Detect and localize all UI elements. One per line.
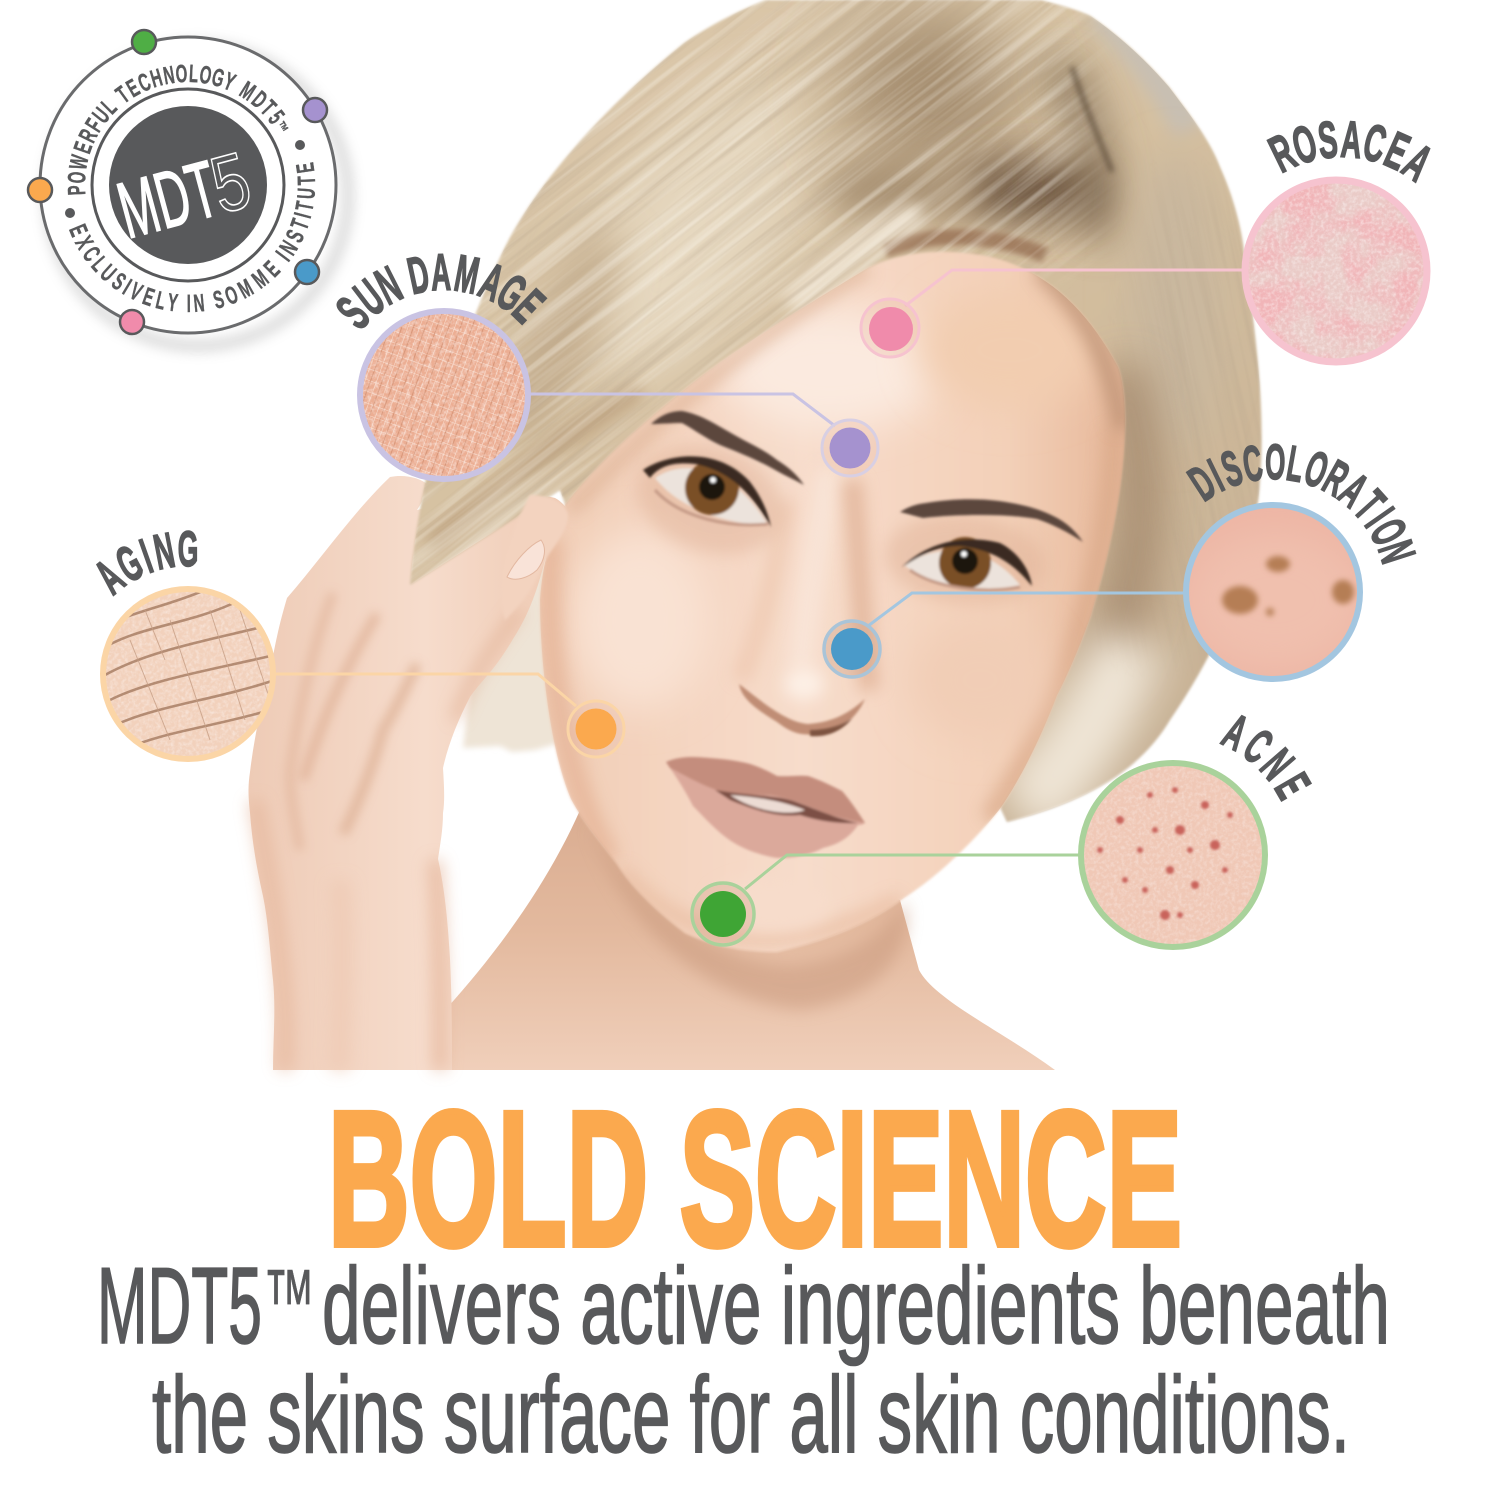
badge bottom arc text: N bbox=[192, 289, 206, 318]
rosacea label: S bbox=[1315, 110, 1340, 170]
aging label: A bbox=[85, 550, 135, 605]
callout: aging bbox=[85, 522, 624, 762]
aging connector bbox=[272, 674, 576, 706]
badge top arc text: F bbox=[80, 114, 109, 137]
discoloration label: C bbox=[1239, 436, 1266, 493]
badge bottom arc text: I bbox=[118, 274, 136, 300]
discoloration label: A bbox=[1329, 463, 1378, 518]
badge top arc text: G bbox=[209, 63, 227, 93]
acne skin sample bbox=[1078, 760, 1268, 950]
aging label: G bbox=[108, 535, 152, 593]
badge bottom arc text: E bbox=[291, 161, 320, 175]
portrait photo of woman bbox=[0, 0, 1500, 1070]
sun damage label: A bbox=[471, 251, 513, 313]
discoloration label: S bbox=[1215, 440, 1249, 498]
badge bottom arc text: I bbox=[187, 290, 191, 318]
badge bottom arc text: S bbox=[210, 285, 227, 315]
aging label: G bbox=[178, 522, 198, 577]
badge bottom arc text: L bbox=[86, 252, 113, 277]
badge top arc text bbox=[63, 60, 291, 196]
rosacea label: C bbox=[1358, 112, 1392, 174]
acne label: A bbox=[1214, 704, 1256, 762]
badge inner ring bbox=[92, 89, 284, 281]
sun damage label: S bbox=[325, 286, 380, 339]
discoloration marker bbox=[824, 621, 880, 677]
badge bottom arc text: T bbox=[286, 215, 315, 234]
acne connector bbox=[745, 855, 1080, 889]
badge top arc text: N bbox=[161, 61, 177, 90]
sun damage label: M bbox=[450, 243, 484, 305]
discoloration label: O bbox=[1297, 441, 1335, 500]
sun damage skin sample bbox=[358, 310, 530, 482]
badge bottom arc text: Y bbox=[166, 289, 180, 318]
rosacea label: E bbox=[1377, 120, 1418, 181]
discoloration label: T bbox=[1343, 481, 1395, 530]
badge bottom arc text: S bbox=[106, 268, 131, 296]
sun damage label: N bbox=[366, 254, 411, 316]
callout: acne bbox=[692, 704, 1320, 950]
badge top arc text: R bbox=[74, 125, 103, 147]
badge bottom arc text: U bbox=[293, 187, 321, 200]
discoloration label: N bbox=[1367, 535, 1425, 569]
badge top arc text: E bbox=[122, 74, 144, 103]
acne label: N bbox=[1250, 740, 1304, 790]
badge bottom arc text: O bbox=[221, 281, 242, 311]
badge top arc text: M bbox=[235, 76, 260, 107]
badge bottom arc text: I bbox=[271, 246, 296, 267]
nose bbox=[739, 668, 865, 736]
right eye bbox=[902, 537, 1032, 590]
badge bottom arc text: V bbox=[125, 277, 147, 307]
sun damage label: G bbox=[487, 262, 537, 323]
discoloration label: R bbox=[1314, 450, 1357, 508]
neck and shoulders bbox=[447, 760, 1055, 1070]
rosacea connector bbox=[905, 270, 1245, 306]
aging skin sample bbox=[100, 586, 276, 762]
rosacea label: O bbox=[1286, 113, 1323, 175]
right eyebrow bbox=[900, 499, 1083, 542]
badge top arc text: L bbox=[96, 94, 123, 120]
badge top arc text: C bbox=[134, 68, 155, 98]
badge top arc text: H bbox=[147, 64, 166, 94]
callout: sun damage bbox=[325, 242, 878, 482]
discoloration label: D bbox=[1180, 455, 1225, 512]
rosacea label bbox=[1260, 110, 1443, 192]
badge top arc text: O bbox=[198, 61, 214, 90]
lips bbox=[666, 757, 865, 858]
subheading text block bbox=[97, 1245, 1390, 1476]
badge bottom arc text: I bbox=[289, 210, 317, 221]
badge top arc text: Y bbox=[220, 67, 239, 97]
badge top arc text: T bbox=[111, 81, 135, 109]
discoloration label: L bbox=[1283, 436, 1308, 493]
subheading text block: ™ bbox=[263, 1252, 315, 1352]
rosacea label: A bbox=[1339, 110, 1364, 169]
sun damage label: U bbox=[343, 268, 395, 327]
rosacea label: A bbox=[1393, 132, 1443, 192]
rosacea skin sample bbox=[1240, 175, 1432, 367]
badge top arc text: L bbox=[188, 60, 199, 88]
badge shadow bbox=[48, 46, 348, 346]
acne label: E bbox=[1264, 765, 1320, 808]
badge bottom arc text: E bbox=[259, 256, 286, 283]
discoloration label: O bbox=[1265, 435, 1286, 490]
face bbox=[540, 252, 1125, 952]
badge bottom arc text: C bbox=[77, 242, 106, 267]
badge logo text: 5 bbox=[202, 135, 260, 230]
discoloration label: I bbox=[1201, 449, 1232, 502]
badge bottom arc text: E bbox=[139, 283, 158, 312]
badge top arc text: W bbox=[64, 152, 95, 172]
hair bbox=[409, 0, 1264, 824]
acne label bbox=[1214, 704, 1320, 808]
discoloration label bbox=[1180, 435, 1425, 569]
badge bottom arc text: U bbox=[95, 259, 121, 287]
callout: discoloration bbox=[824, 435, 1425, 682]
badge top arc text: 5 bbox=[262, 106, 290, 129]
badge top arc text: T bbox=[255, 95, 281, 121]
badge disc bbox=[109, 106, 267, 264]
badge bottom arc text: L bbox=[153, 286, 168, 316]
sun damage label: D bbox=[403, 244, 434, 305]
discoloration connector bbox=[868, 593, 1185, 626]
aging label: I bbox=[134, 530, 159, 584]
sun damage label bbox=[325, 242, 556, 339]
acne label: C bbox=[1233, 719, 1282, 774]
pale hair wisp beneath hand bbox=[463, 555, 570, 752]
sun damage label: A bbox=[430, 242, 452, 302]
subheading text block: MDT5 bbox=[97, 1245, 262, 1367]
badge outer ring bbox=[40, 37, 336, 333]
fingertip and nail resting on temple bbox=[501, 495, 568, 620]
badge bottom arc text: S bbox=[281, 226, 310, 247]
acne marker bbox=[692, 883, 754, 945]
badge: MDT5 powerful technology bbox=[28, 30, 348, 346]
badge logo text: MDT bbox=[109, 144, 227, 255]
aging label: N bbox=[150, 523, 179, 581]
badge bottom arc text: X bbox=[69, 232, 99, 254]
chin shadow on neck bbox=[590, 825, 907, 1010]
badge top arc text: P bbox=[63, 184, 91, 196]
badge top arc text: E bbox=[69, 138, 98, 157]
badge separator dots bbox=[65, 140, 305, 218]
rosacea label: R bbox=[1260, 122, 1304, 183]
badge bottom arc text: T bbox=[293, 175, 321, 186]
discoloration skin sample bbox=[1183, 502, 1365, 682]
badge bottom arc text: T bbox=[291, 199, 320, 213]
left eyebrow bbox=[651, 411, 804, 485]
badge bottom arc text: M bbox=[247, 265, 274, 294]
sun damage connector bbox=[530, 394, 835, 426]
left eye bbox=[643, 456, 771, 527]
rosacea marker bbox=[861, 299, 919, 357]
badge top arc text: ™ bbox=[269, 119, 291, 138]
badge bottom arc text bbox=[63, 161, 321, 318]
sun damage marker bbox=[822, 420, 878, 476]
callout: rosacea bbox=[861, 110, 1443, 367]
badge bottom arc text: E bbox=[63, 221, 93, 241]
aging label bbox=[85, 522, 198, 605]
discoloration label: O bbox=[1359, 511, 1417, 554]
badge top arc text: D bbox=[246, 86, 272, 114]
hand against face bbox=[248, 476, 569, 1070]
badge coloured nodes bbox=[28, 30, 327, 334]
aging marker bbox=[568, 701, 624, 757]
badge bottom arc text: N bbox=[274, 236, 304, 260]
badge top arc text: O bbox=[175, 60, 188, 89]
badge top arc text: U bbox=[87, 103, 116, 129]
badge bottom arc text: M bbox=[234, 274, 258, 304]
discoloration label: I bbox=[1354, 499, 1404, 537]
sun damage label: E bbox=[502, 278, 556, 334]
badge top arc text: O bbox=[63, 171, 92, 184]
